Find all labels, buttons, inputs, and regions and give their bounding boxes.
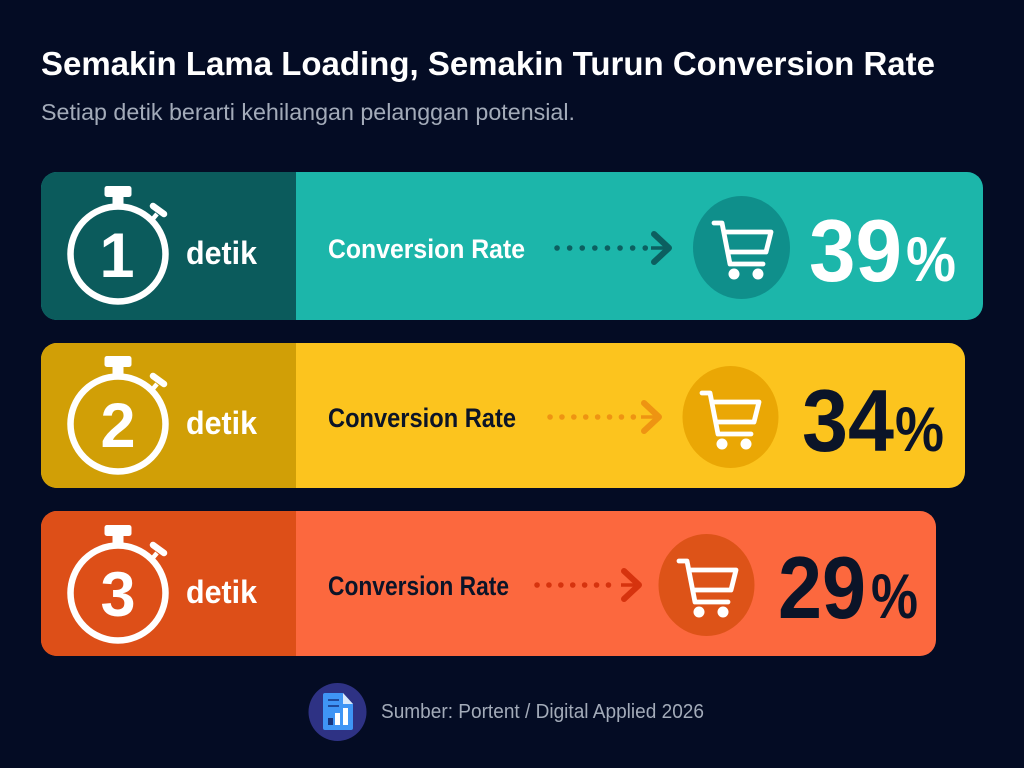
time section [41,172,296,320]
panel: 2 detik, 34% [41,343,965,488]
metric label: Conversion Rate [328,571,509,601]
bar background [41,343,965,488]
metric label: Conversion Rate [328,234,525,264]
time section [41,343,296,488]
time label: detik [186,235,257,271]
icon: cart [658,534,754,636]
bar background [41,511,936,656]
icon: stopwatch 2: 2 [100,391,136,461]
value [809,201,956,300]
icon: stopwatch 3: 3 [100,560,136,630]
icon: source document [308,683,366,741]
subtitle: Setiap detik berarti kehilangan pelanggan potensial. [41,99,575,125]
value: 39 [809,201,902,300]
panel: 3 detik, 29% [41,511,936,656]
icon: cart [693,196,790,299]
title: Semakin Lama Loading, Semakin Turun Conversion Rate [41,45,935,82]
value: % [871,562,918,632]
value: 29 [778,538,866,637]
time section [41,511,296,656]
time label: detik [186,405,257,441]
icon: stopwatch 3 [70,525,166,640]
arrow [557,234,669,262]
icon: cart [682,366,778,468]
icon: stopwatch 1 [70,186,166,302]
bar background [41,172,983,320]
value [802,371,944,470]
value: % [906,225,956,295]
source text: Sumber: Portent / Digital Applied 2026 [381,701,704,723]
value: % [895,395,944,465]
arrow [550,403,659,431]
metric label: Conversion Rate [328,403,516,433]
arrow [537,571,639,599]
icon: stopwatch 2 [70,356,166,472]
panel: 1 detik, 39% [41,172,983,320]
time label: detik [186,574,257,610]
value: 34 [802,371,894,470]
value [778,538,918,637]
icon: stopwatch 1: 1 [99,221,135,291]
